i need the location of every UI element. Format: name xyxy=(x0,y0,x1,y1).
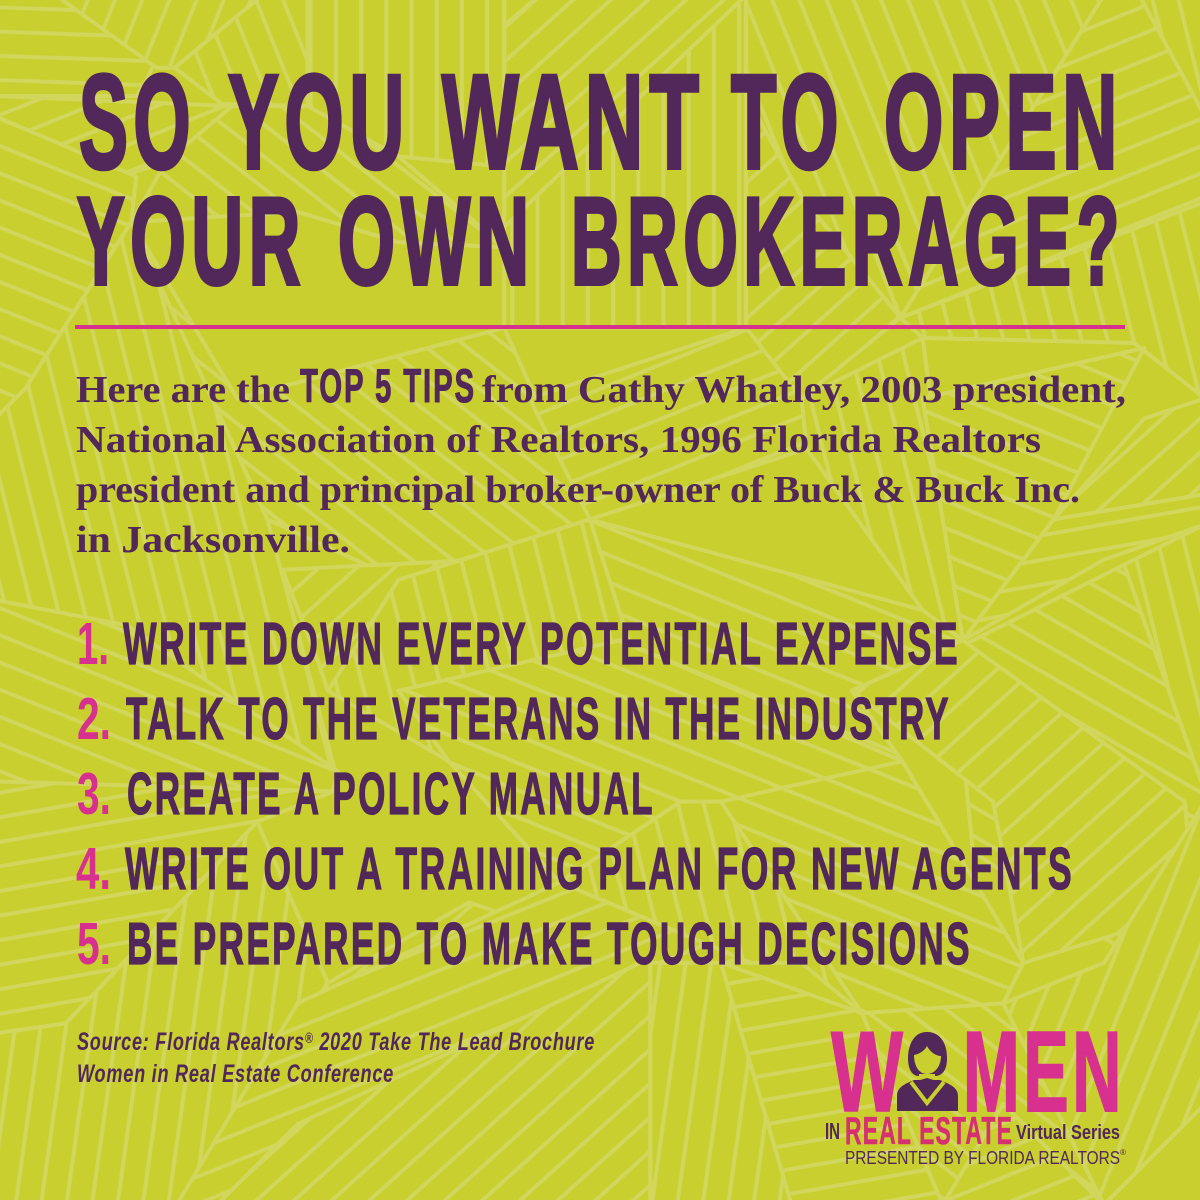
tip 2: 2. xyxy=(77,686,111,752)
logo: Women in Real Estate: Virtual Series xyxy=(1016,1122,1120,1144)
source note: ® xyxy=(305,1030,314,1047)
tip 1: 1. xyxy=(77,611,109,677)
source note xyxy=(77,1028,595,1088)
title: WANT xyxy=(442,48,705,197)
intro paragraph xyxy=(76,359,1126,561)
source note: 2020 Take The Lead Brochure xyxy=(314,1028,595,1056)
logo: Women in Real Estate xyxy=(825,1009,1126,1168)
tips list xyxy=(76,611,1074,977)
intro paragraph: TOP 5 TIPS xyxy=(300,359,476,412)
divider rule xyxy=(75,325,1125,329)
intro paragraph: in Jacksonville. xyxy=(76,519,350,561)
intro paragraph: from Cathy Whatley, 2003 president, xyxy=(482,369,1126,411)
intro paragraph: National Association of Realtors, 1996 Florida Realtors xyxy=(76,419,1041,461)
intro paragraph: Here are the xyxy=(76,369,290,411)
logo: Women in Real Estate: ® xyxy=(1120,1148,1126,1157)
title: YOU xyxy=(228,48,410,197)
title: YOUR xyxy=(77,173,306,311)
tip 3: 3. xyxy=(77,761,111,827)
title xyxy=(77,48,1125,311)
tip 3: CREATE A POLICY MANUAL xyxy=(127,761,655,827)
logo: Women in Real Estate: W xyxy=(831,1009,903,1136)
tip 4: 4. xyxy=(76,836,111,902)
logo: Women in Real Estate: REAL ESTATE xyxy=(845,1110,1013,1153)
source note: Women in Real Estate Conference xyxy=(77,1060,394,1088)
icon: woman xyxy=(897,1032,958,1111)
source note: Source: Florida Realtors xyxy=(77,1028,391,1056)
title: OWN xyxy=(338,173,535,311)
title: SO xyxy=(79,48,196,197)
title: TO xyxy=(731,48,844,197)
intro paragraph: president and principal broker-owner of Buck & Buck Inc. xyxy=(76,469,1080,511)
tip 3 xyxy=(77,761,655,827)
tip 5: 5. xyxy=(77,911,111,977)
logo: Women in Real Estate: PRESENTED BY FLORIDA REALTORS xyxy=(845,1148,1120,1168)
logo: Women in Real Estate: IN xyxy=(825,1118,840,1144)
